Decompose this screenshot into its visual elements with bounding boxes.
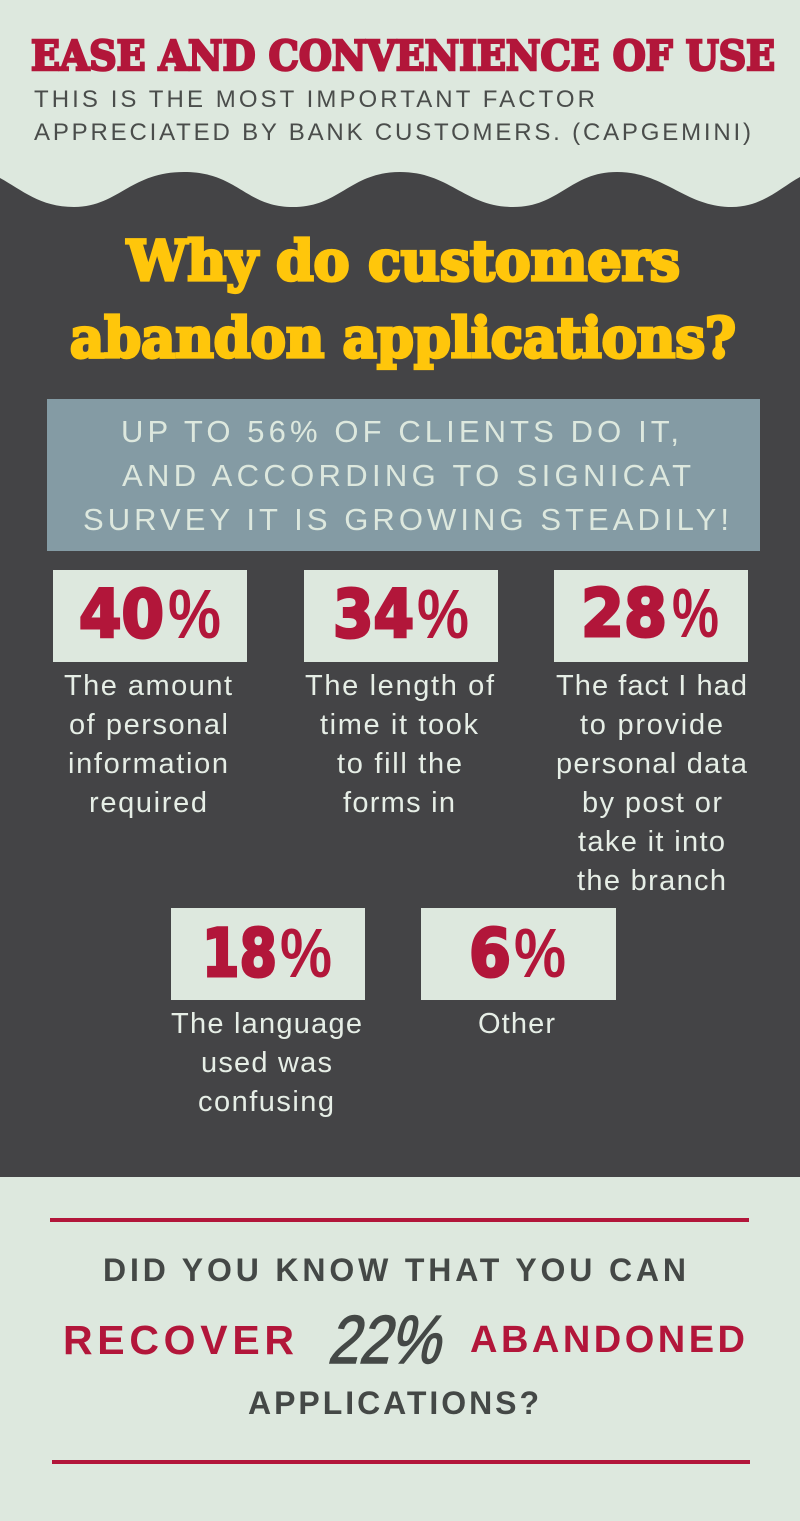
- stat label: 28%: [556, 670, 748, 897]
- stat card: 18%: [171, 908, 365, 1000]
- stat label: 28%: by post or: [582, 787, 722, 819]
- stat label: 40%: [64, 670, 232, 819]
- stat label: 18%: used was: [201, 1047, 332, 1079]
- stat card: 18%: 18: [202, 915, 277, 992]
- stat card: 6%: [421, 908, 616, 1000]
- heading: why do customers abandon applications: Why do customers: [126, 228, 680, 293]
- stat label: 18%: [171, 1008, 362, 1118]
- subtitle text: THIS IS THE MOST IMPORTANT FACTOR: [34, 86, 595, 113]
- panel: survey banner: [47, 399, 760, 551]
- stat label: 18%: The language: [171, 1008, 362, 1040]
- stat label: 34%: The length of: [305, 670, 495, 702]
- stat label: 34%: [305, 670, 495, 819]
- stat card: 6%: %: [514, 914, 566, 992]
- stat label: 40%: required: [89, 787, 207, 819]
- panel: bottom callout: [50, 1218, 750, 1464]
- panel: bottom callout: DID YOU KNOW THAT YOU CAN: [103, 1252, 686, 1288]
- heading: why do customers abandon applications: abandon applications?: [70, 305, 736, 370]
- stat card: 40%: %: [168, 575, 221, 653]
- subtitle text: [34, 86, 751, 146]
- stat label: 28%: personal data: [556, 748, 748, 780]
- panel: survey banner: UP TO 56% OF CLIENTS DO IT,: [121, 414, 679, 449]
- stat label: 34%: time it took: [320, 709, 478, 741]
- stat label: 40%: The amount: [64, 670, 232, 702]
- stat card: 18%: %: [280, 914, 332, 992]
- stat label: 6%: Other: [478, 1008, 555, 1040]
- panel: survey banner: SURVEY IT IS GROWING STEADILY!: [83, 502, 729, 537]
- panel: survey banner: AND ACCORDING TO SIGNICAT: [122, 458, 691, 493]
- stat label: 28%: The fact I had: [556, 670, 747, 702]
- stat card: 28%: 28: [581, 575, 667, 652]
- panel: bottom callout: APPLICATIONS?: [248, 1385, 539, 1421]
- stat card: 40%: [53, 570, 247, 662]
- stat card: 34%: [304, 570, 498, 662]
- stat label: 28%: the branch: [577, 865, 726, 897]
- panel: bottom callout: ABANDONED: [470, 1319, 745, 1361]
- stat label: 28%: to provide: [580, 709, 723, 741]
- stat card: 34%: 34: [333, 576, 414, 653]
- stat label: 28%: take it into: [578, 826, 725, 858]
- stat label: 34%: forms in: [343, 787, 455, 819]
- subtitle text: APPRECIATED BY BANK CUSTOMERS. (CAPGEMINI): [34, 119, 751, 146]
- stat label: 40%: of personal: [69, 709, 228, 741]
- heading: why do customers abandon applications: [70, 228, 736, 370]
- panel: dark wavy background: [0, 172, 800, 1177]
- stat card: 28%: %: [672, 574, 719, 652]
- stat label: 18%: confusing: [198, 1086, 334, 1118]
- panel: bottom callout: RECOVER: [63, 1317, 294, 1363]
- stat label: 40%: information: [68, 748, 228, 780]
- stat card: 6%: 6: [469, 915, 511, 992]
- stat card: 28%: [554, 570, 748, 662]
- stat label: 34%: to fill the: [337, 748, 462, 780]
- stat card: 40%: 40: [79, 576, 164, 653]
- panel: bottom callout: 22%: [323, 1301, 454, 1378]
- stat card: 34%: %: [417, 575, 469, 653]
